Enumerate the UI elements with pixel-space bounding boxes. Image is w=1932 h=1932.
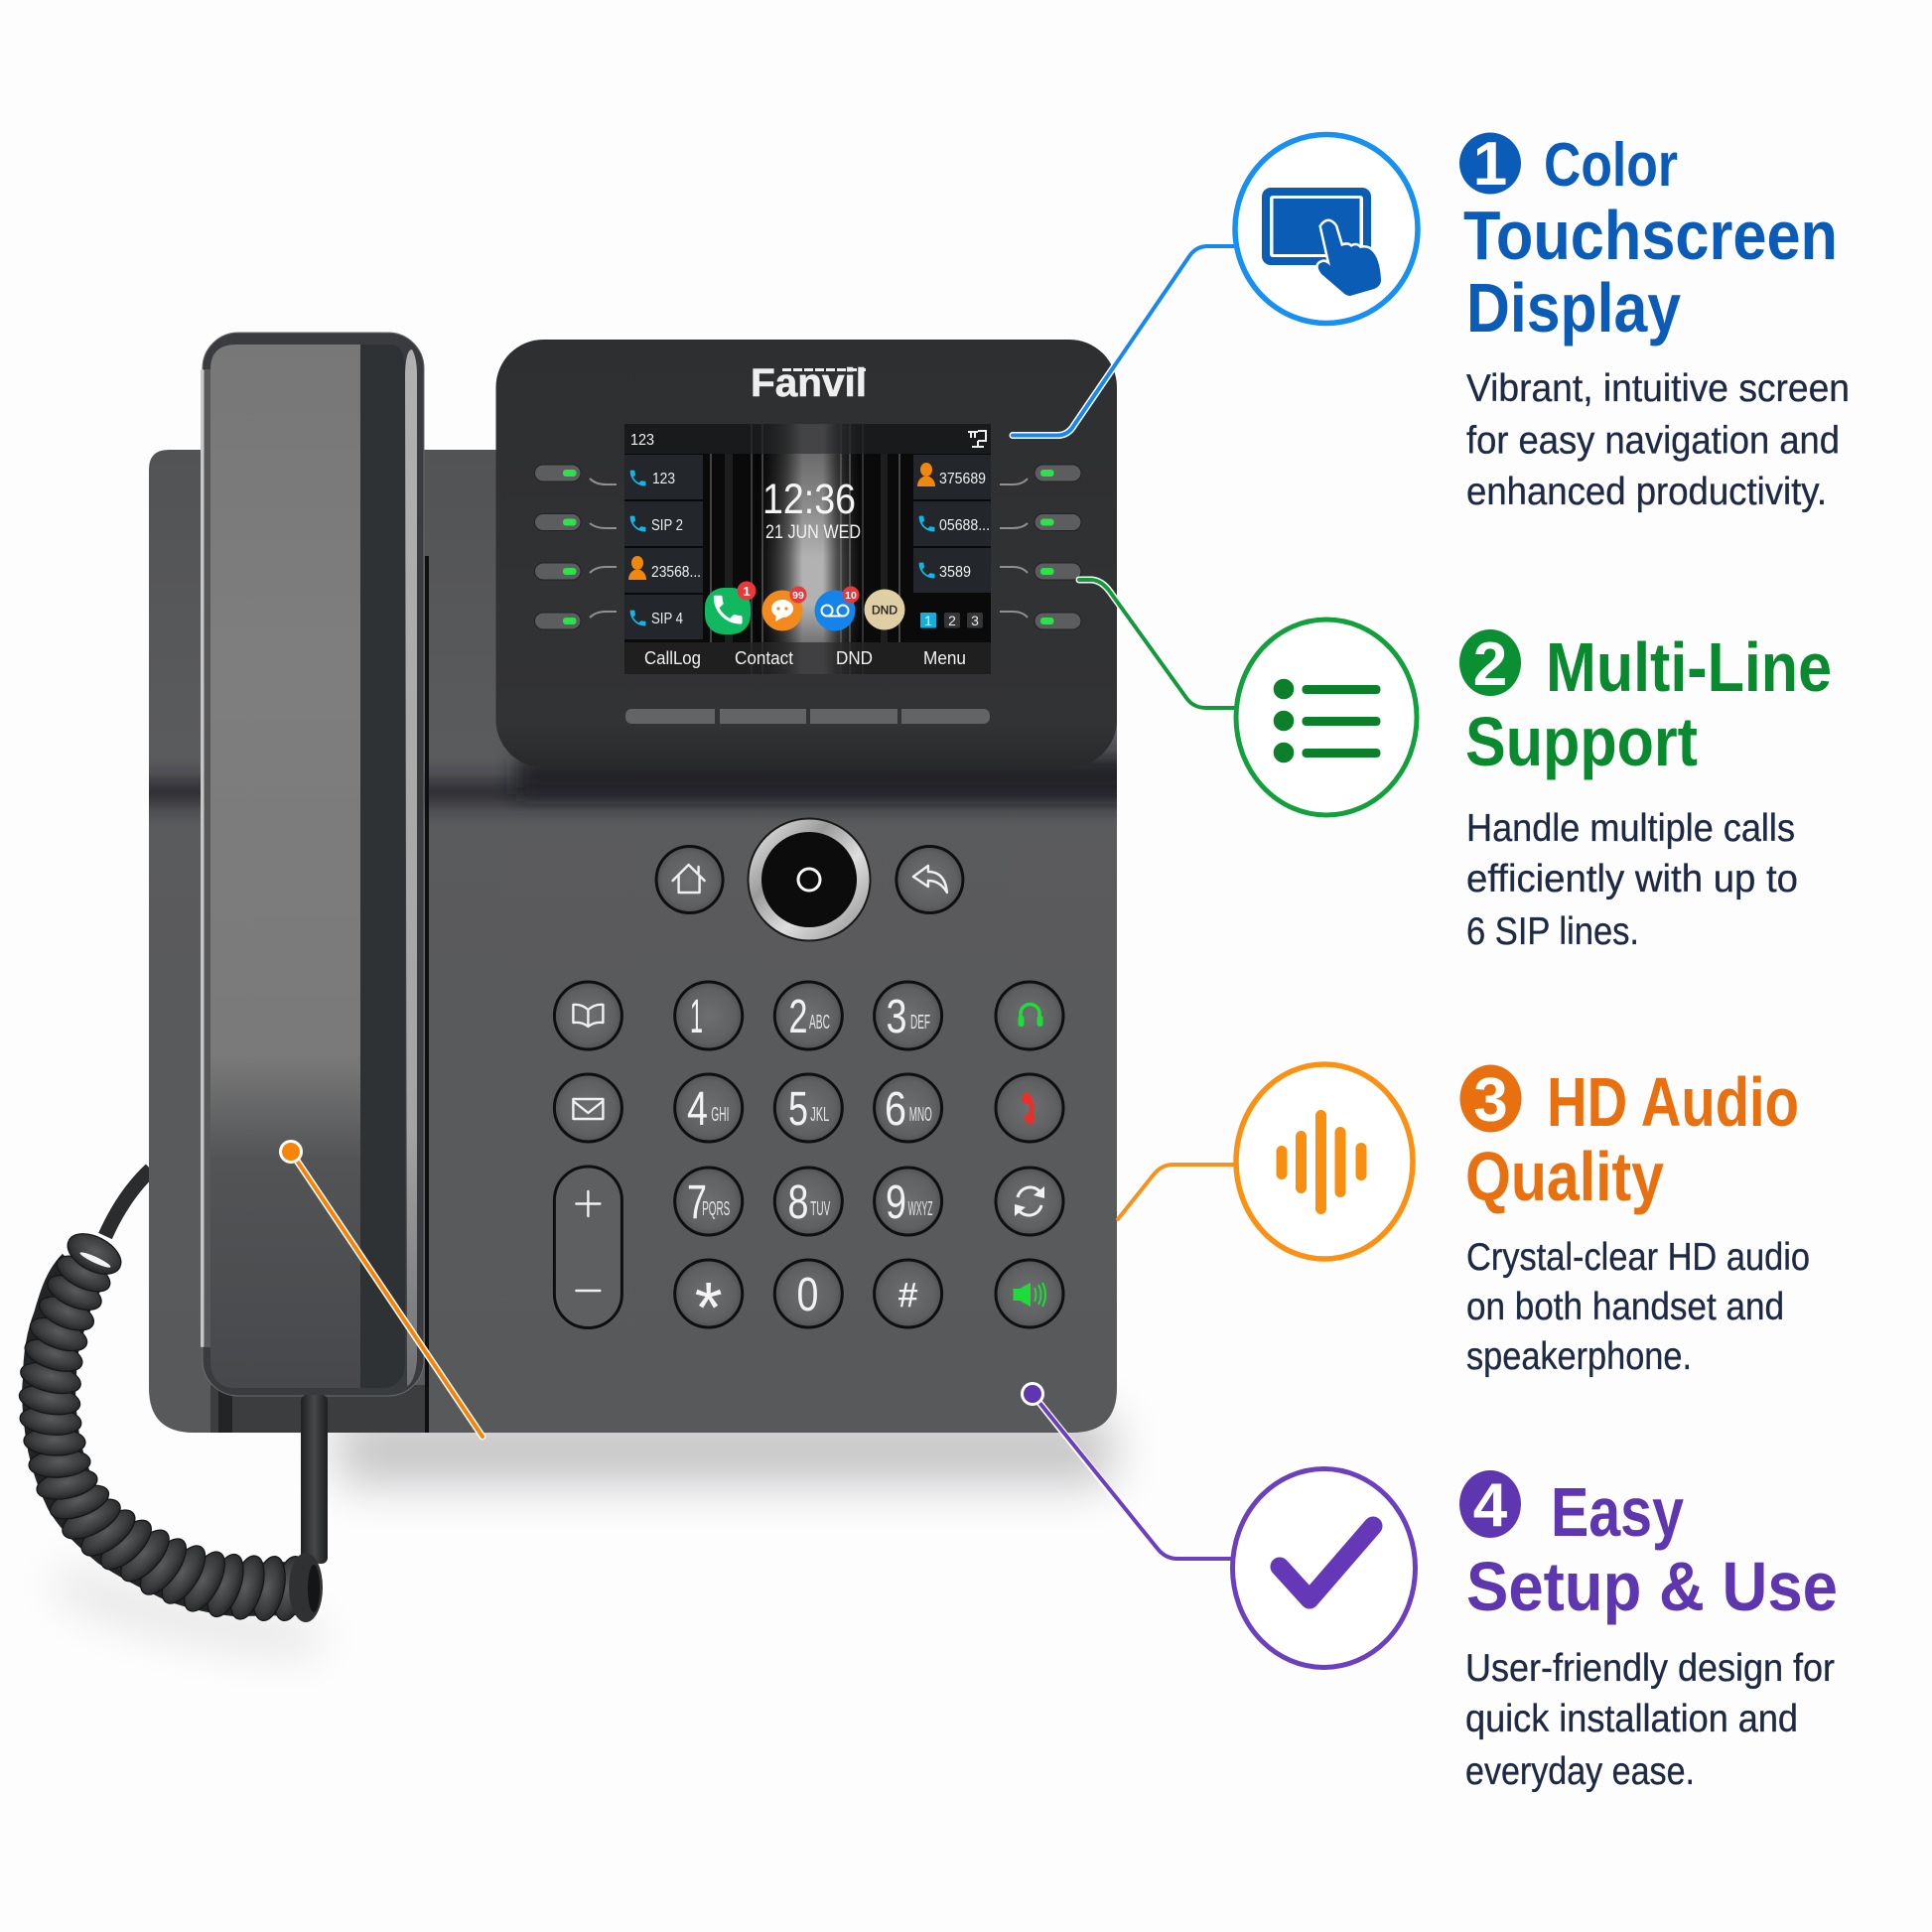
handset cradle recess xyxy=(210,556,429,1433)
coiled cord xyxy=(17,1225,323,1623)
icon: touchscreen circle xyxy=(1235,135,1418,324)
key star xyxy=(675,1260,743,1348)
heading 3: HD Audio xyxy=(1547,1063,1799,1141)
left contact cells: 23568... xyxy=(651,564,701,581)
key 8: TUV xyxy=(810,1198,831,1220)
status bar xyxy=(630,431,986,449)
key 0: 0 xyxy=(796,1269,818,1321)
heading 2: 2 xyxy=(1473,630,1507,699)
app icon: DND: DND xyxy=(872,604,897,618)
clock and date xyxy=(762,476,861,543)
key 4: GHI xyxy=(711,1104,729,1126)
description 1 xyxy=(1466,367,1850,513)
transfer key xyxy=(996,1168,1063,1235)
heading 1: 1 xyxy=(1473,130,1507,199)
heading 3: 3 xyxy=(1473,1066,1508,1135)
softkey labels: CallLog xyxy=(644,647,701,668)
back key xyxy=(897,846,963,913)
home key xyxy=(656,846,723,913)
left contact cells xyxy=(624,455,703,639)
key 6: MNO xyxy=(909,1104,932,1126)
key 2: ABC xyxy=(809,1012,830,1034)
app icon: DND xyxy=(864,590,905,629)
key 8 xyxy=(774,1168,842,1235)
key 4 xyxy=(675,1074,743,1142)
heading 4: Easy xyxy=(1551,1473,1684,1551)
app icon: phone: 1 xyxy=(743,584,751,599)
description 1: enhanced productivity. xyxy=(1466,471,1827,513)
description 1: for easy navigation and xyxy=(1466,419,1840,463)
description 4: everyday ease. xyxy=(1465,1750,1695,1793)
phone base body xyxy=(149,450,1117,1433)
clock and date: 12:36 xyxy=(762,476,856,523)
right contact cells: 05688... xyxy=(939,517,990,534)
key hash xyxy=(875,1260,942,1327)
handset thin cord xyxy=(105,1170,151,1236)
connector line 2 xyxy=(1079,580,1236,708)
key 2: 2 xyxy=(788,991,808,1043)
status bar: 123 xyxy=(630,432,654,449)
key 5: 5 xyxy=(788,1083,808,1136)
right line keys xyxy=(1000,465,1081,629)
speaker key xyxy=(996,1260,1063,1327)
heading 2: Multi-Line xyxy=(1546,628,1832,706)
right contact cells: 3589 xyxy=(939,564,971,581)
key 9: WXYZ xyxy=(908,1198,933,1220)
left contact cells: 123 xyxy=(652,471,675,487)
description 2: 6 SIP lines. xyxy=(1466,910,1639,953)
headset key xyxy=(996,982,1063,1049)
icon: list circle xyxy=(1236,620,1417,815)
heading 1: Color xyxy=(1544,131,1678,200)
feature 2: multi-line xyxy=(1236,620,1832,953)
feature 3: HD audio xyxy=(1236,1063,1810,1378)
heading 3 xyxy=(1459,1063,1799,1215)
icon: check circle xyxy=(1233,1469,1416,1668)
key 8: 8 xyxy=(788,1176,808,1229)
key 5: JKL xyxy=(810,1104,829,1126)
page indicators: 1 xyxy=(924,613,932,628)
feature 1: touchscreen xyxy=(1235,130,1850,513)
feature 4: easy setup xyxy=(1233,1469,1838,1793)
key 5 xyxy=(774,1074,842,1142)
key 7: 7 xyxy=(687,1176,707,1229)
drop shadows xyxy=(60,1415,1112,1638)
softkey labels: Contact xyxy=(735,647,793,668)
key 7 xyxy=(675,1168,743,1235)
shadow under display panel xyxy=(99,757,1172,804)
message key xyxy=(554,1074,621,1142)
phonebook key xyxy=(554,982,621,1049)
left line keys xyxy=(534,465,617,629)
navigation ring xyxy=(749,818,870,941)
handset straight cord xyxy=(301,1395,328,1564)
Fanvil logo: Fanvil xyxy=(751,361,867,405)
key star: * xyxy=(695,1269,723,1348)
description 3: on both handset and xyxy=(1466,1286,1784,1328)
volume rocker xyxy=(554,1167,621,1328)
connector line 1 xyxy=(1013,246,1234,435)
right contact cells xyxy=(913,455,991,593)
heading 4: Setup & Use xyxy=(1466,1548,1838,1625)
left contact cells: SIP 2 xyxy=(651,517,683,534)
connector line 4 xyxy=(1021,1382,1231,1559)
clock and date: 21 JUN WED xyxy=(765,522,861,543)
description 1: Vibrant, intuitive screen xyxy=(1466,367,1850,410)
left contact cells: SIP 4 xyxy=(651,611,683,627)
soft keys xyxy=(625,709,990,724)
touchscreen xyxy=(624,424,991,674)
heading 4: 4 xyxy=(1473,1471,1508,1540)
key 1 xyxy=(675,982,743,1049)
page indicators: 3 xyxy=(971,613,979,628)
heading 1: Display xyxy=(1466,269,1681,346)
description 3 xyxy=(1466,1236,1810,1378)
app icon: chat: 99 xyxy=(792,590,804,602)
connector line 3 xyxy=(279,1140,1235,1437)
softkey labels: DND xyxy=(836,647,873,668)
description 3: speakerphone. xyxy=(1466,1335,1692,1378)
key 3: DEF xyxy=(910,1012,930,1034)
app icon: chat xyxy=(762,586,806,631)
description 4 xyxy=(1465,1647,1835,1793)
description 3: Crystal-clear HD audio xyxy=(1466,1236,1810,1279)
icon: sound wave circle xyxy=(1236,1064,1413,1259)
heading 2 xyxy=(1459,628,1832,780)
right contact cells: 375689 xyxy=(939,471,986,487)
page indicators: 2 xyxy=(948,613,956,628)
key 3: 3 xyxy=(886,991,907,1043)
heading 1 xyxy=(1459,130,1838,346)
phone illustration xyxy=(17,333,1172,1638)
heading 3: Quality xyxy=(1465,1138,1664,1215)
key 9: 9 xyxy=(886,1176,906,1229)
key 6 xyxy=(875,1074,942,1142)
description 4: quick installation and xyxy=(1465,1698,1798,1740)
key 0 xyxy=(774,1260,842,1327)
display head panel xyxy=(496,340,1117,767)
softkey labels: Menu xyxy=(923,647,966,668)
key 7: PQRS xyxy=(702,1198,730,1220)
page indicators xyxy=(920,613,983,628)
description 2: efficiently with up to xyxy=(1466,858,1798,900)
softkey labels xyxy=(644,647,966,668)
app icon: voicemail xyxy=(814,586,860,631)
key 4: 4 xyxy=(687,1083,708,1136)
hang-up key xyxy=(996,1074,1063,1142)
keypad xyxy=(554,818,1063,1348)
description 4: User-friendly design for xyxy=(1465,1647,1835,1690)
key 1: 1 xyxy=(690,991,703,1043)
handset xyxy=(201,333,424,1396)
description 2 xyxy=(1466,807,1798,953)
key 9 xyxy=(875,1168,942,1235)
heading 2: Support xyxy=(1465,703,1698,780)
description 2: Handle multiple calls xyxy=(1466,807,1795,850)
key 2 xyxy=(774,982,842,1049)
key 3 xyxy=(875,982,942,1049)
app icon: phone xyxy=(705,582,757,634)
key 6: 6 xyxy=(885,1083,906,1136)
heading 1: Touchscreen xyxy=(1463,197,1838,274)
app icon: voicemail: 10 xyxy=(845,590,857,602)
key hash: # xyxy=(898,1277,917,1314)
heading 4 xyxy=(1459,1470,1838,1625)
